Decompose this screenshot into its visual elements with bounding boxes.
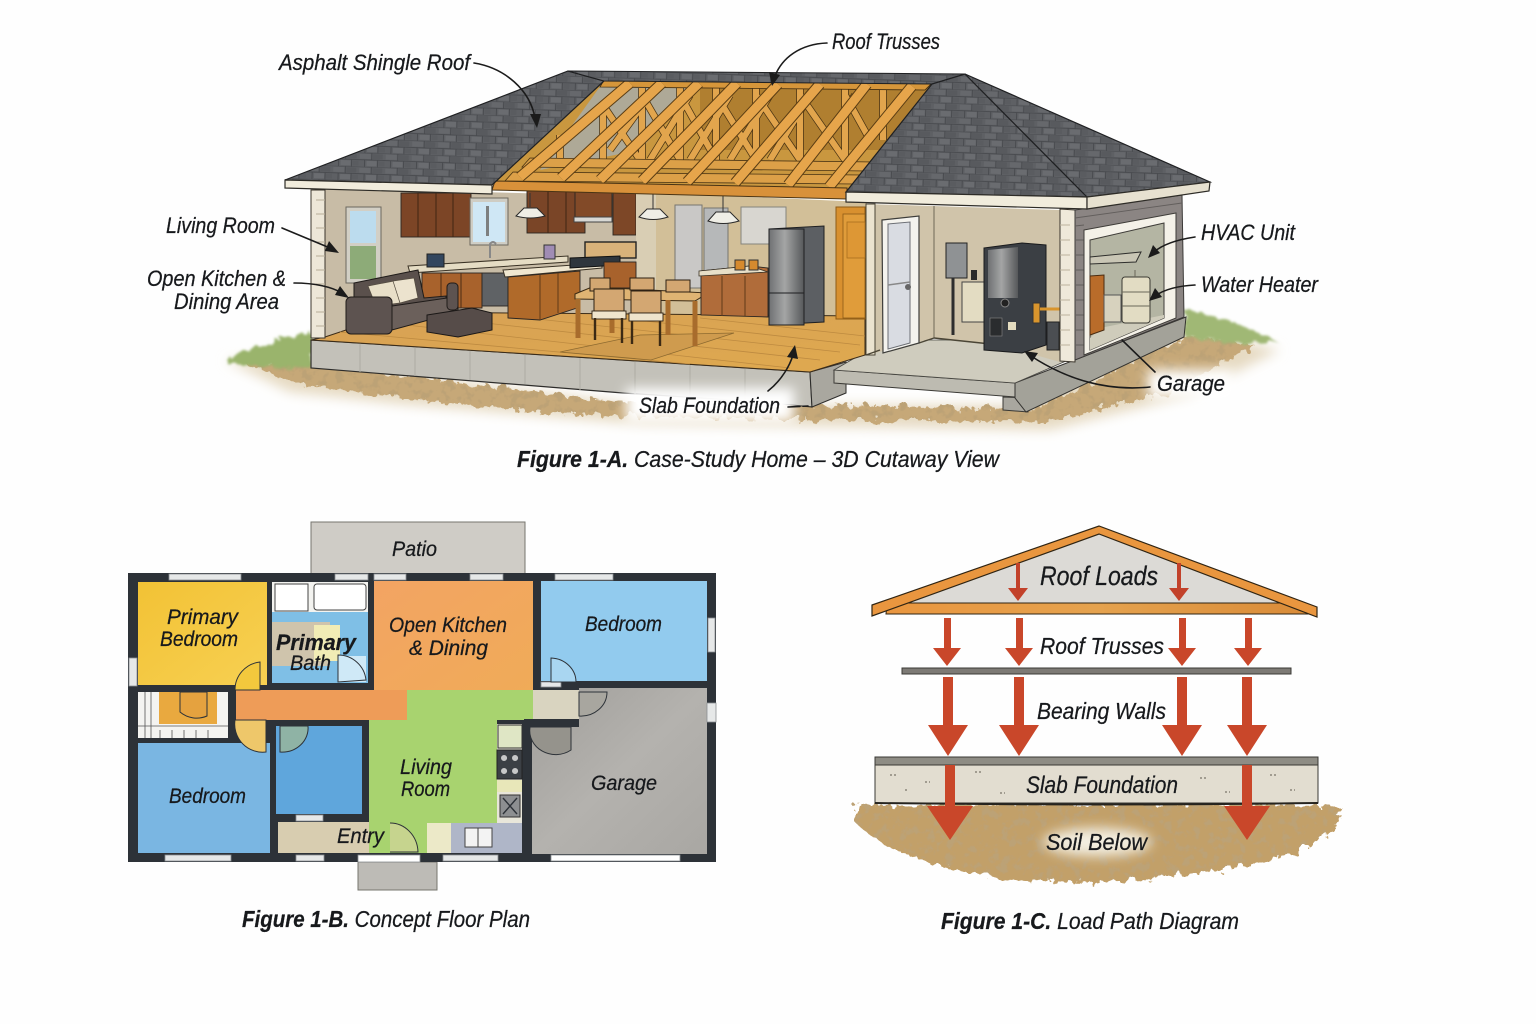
- label: Living Room: Living Room: [166, 213, 275, 238]
- room: right bedroom: [541, 581, 707, 681]
- label: Roof Trusses: Roof Trusses: [832, 29, 940, 54]
- label: Slab Foundation: Slab Foundation: [639, 393, 780, 418]
- sofa: [346, 270, 458, 334]
- room: garage: [532, 688, 707, 854]
- panel: 3D cutaway house: [147, 29, 1320, 430]
- label: Water Heater: [1149, 272, 1320, 301]
- bearing beam: [902, 668, 1291, 674]
- ottoman: [427, 308, 492, 337]
- stainless refrigerator: [769, 226, 824, 325]
- room: open kitchen and dining: [374, 581, 533, 691]
- dividing wall and pantry: [636, 193, 656, 305]
- room labels: Room: [401, 778, 450, 801]
- wood floor: [311, 312, 865, 372]
- roof truss: [872, 526, 1317, 617]
- closet: [138, 692, 228, 738]
- room labels: Bedroom: [585, 613, 662, 636]
- living room window: [346, 207, 381, 283]
- HVAC furnace unit: [984, 243, 1060, 353]
- utility: [533, 690, 579, 720]
- patio: Patio: [392, 538, 437, 561]
- label: Asphalt Shingle Roof: [277, 50, 541, 128]
- patio: [311, 522, 525, 574]
- diagram labels: Soil Below: [1046, 829, 1148, 855]
- diagram labels: Bearing Walls: [1037, 698, 1166, 724]
- kitchen counter and base cabinets: [408, 242, 568, 308]
- water softener tank and control panel: [946, 243, 986, 335]
- room labels: Bedroom: [169, 785, 246, 808]
- room labels: Bedroom: [160, 628, 238, 651]
- entry: [278, 822, 369, 853]
- asphalt shingle roof: [285, 71, 1210, 197]
- utility room wall: [866, 204, 1060, 362]
- label: Water Heater: Water Heater: [1201, 272, 1320, 297]
- upper kitchen cabinets: [401, 191, 636, 237]
- door swings: [180, 655, 607, 852]
- left corner post: [311, 190, 325, 338]
- windows: [129, 574, 716, 862]
- grass left: [225, 332, 311, 368]
- room labels: & Dining: [409, 637, 488, 660]
- ground soil under house: [225, 330, 1280, 430]
- room labels: Garage: [591, 772, 657, 795]
- label: Open Kitchen and Dining Area: [147, 266, 349, 314]
- room: living room: [369, 690, 533, 853]
- kitchen window: [470, 198, 508, 245]
- utility door: [882, 216, 919, 353]
- dining set: [575, 278, 708, 346]
- room labels: Primary: [276, 630, 358, 655]
- label: Open Kitchen and Dining Area: Open Kitchen &: [147, 266, 286, 291]
- interior walls: [138, 573, 707, 862]
- label: Garage: Garage: [1157, 371, 1225, 396]
- roof fascia: [285, 180, 1210, 209]
- kitchen rear wall: [656, 193, 867, 320]
- diagram labels: [1026, 561, 1178, 855]
- room labels: Living: [400, 756, 452, 779]
- room: primary bedroom: [138, 582, 267, 685]
- room labels: [160, 606, 662, 848]
- panel: concept floor plan: [128, 522, 716, 890]
- label: Slab Foundation: [626, 345, 808, 422]
- diagram labels: Slab Foundation: [1026, 772, 1178, 799]
- interior orange door: [836, 207, 865, 319]
- truss load arrows: [933, 618, 1262, 666]
- house outer walls: [128, 573, 716, 862]
- white fridge and rear door: [675, 205, 786, 288]
- soil: [855, 803, 1341, 882]
- label: Garage: [1024, 340, 1232, 398]
- front stoop: [358, 862, 437, 890]
- kitchen counter and appliances: [427, 724, 522, 853]
- range and right cabinets: [570, 242, 636, 288]
- label: Living Room: [166, 213, 339, 253]
- garage siding wall: [1075, 195, 1184, 360]
- right base cabinets: [699, 260, 768, 317]
- room labels: Bath: [290, 652, 331, 675]
- room: middle bedroom: [276, 726, 362, 814]
- panel: load path diagram: [855, 526, 1341, 882]
- roof trusses: [492, 80, 932, 199]
- label: HVAC Unit: [1148, 220, 1296, 258]
- room labels: Entry: [337, 825, 385, 848]
- room: left bedroom: [138, 743, 270, 853]
- garage post: [1060, 209, 1075, 362]
- label: Open Kitchen and Dining Area: Dining Area: [174, 289, 279, 314]
- roof load arrows: [1008, 563, 1189, 601]
- slab foundation: [311, 317, 1186, 412]
- label: Asphalt Shingle Roof: Asphalt Shingle Roof: [277, 50, 473, 75]
- caption: Figure 1-B: Figure 1-B. Concept Floor Plan: [242, 906, 530, 932]
- room labels: Primary: [167, 606, 239, 629]
- diagram labels: Roof Trusses: [1040, 633, 1164, 659]
- label: HVAC Unit: HVAC Unit: [1201, 220, 1296, 245]
- grass right: [1184, 310, 1278, 343]
- water heater: [1122, 270, 1150, 323]
- wall load arrows: [928, 677, 1267, 756]
- slab: [875, 757, 1318, 804]
- caption: Figure 1-A: Figure 1-A. Case-Study Home – 3D Cutaway View: [517, 446, 1000, 472]
- room labels: Open Kitchen: [389, 614, 507, 637]
- garage opening: [1084, 213, 1176, 355]
- room: primary bath: [268, 582, 368, 683]
- hallway: [236, 690, 407, 720]
- foundation load arrows: [927, 765, 1270, 840]
- island: [503, 263, 602, 320]
- pendant lamps: [516, 193, 739, 224]
- interior back wall: [325, 188, 867, 338]
- label: Roof Trusses: [769, 29, 940, 86]
- caption: Figure 1-C: Figure 1-C. Load Path Diagram: [941, 908, 1239, 934]
- diagram labels: Roof Loads: [1040, 561, 1158, 591]
